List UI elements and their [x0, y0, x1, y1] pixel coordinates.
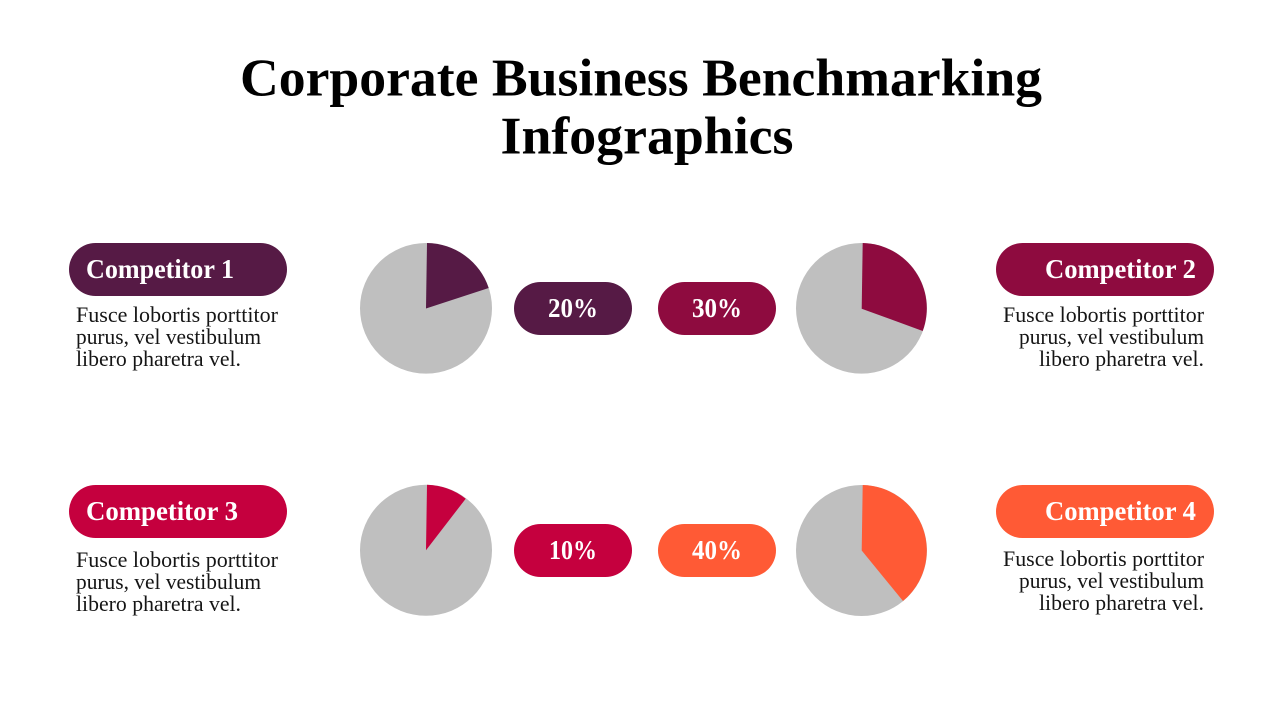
description: competitor 4: purus, vel vestibulum [1019, 568, 1204, 593]
label pill: competitor 1 [69, 243, 287, 296]
description: competitor 4 [1003, 546, 1205, 615]
pie chart: 20% [360, 243, 492, 374]
label pill: competitor 2 [996, 243, 1214, 296]
description: competitor 1: libero pharetra vel. [76, 346, 241, 371]
label pill: competitor 3: Competitor 3 [86, 496, 238, 526]
value pill: 40%: 40% [692, 535, 742, 565]
value pill: 10% [514, 524, 632, 577]
title [240, 50, 1042, 166]
label pill: competitor 4: Competitor 4 [1045, 496, 1196, 526]
value pill: 30% [658, 282, 776, 335]
description: competitor 2 [1003, 302, 1205, 371]
value pill: 20% [514, 282, 632, 335]
value pill: 20%: 20% [548, 293, 598, 323]
value pill: 30%: 30% [692, 293, 742, 323]
value pill: 40% [658, 524, 776, 577]
description: competitor 2: Fusce lobortis porttitor [1003, 302, 1205, 327]
description: competitor 4: Fusce lobortis porttitor [1003, 546, 1205, 571]
description: competitor 3: purus, vel vestibulum [76, 569, 261, 594]
pie chart: 10% [360, 485, 492, 616]
description: competitor 1 [76, 302, 279, 371]
description: competitor 3: libero pharetra vel. [76, 591, 241, 616]
panel: competitor 2 [658, 243, 1214, 374]
title: Corporate Business Benchmarking [240, 50, 1042, 108]
title: Infographics [500, 108, 794, 166]
description: competitor 4: libero pharetra vel. [1039, 590, 1204, 615]
value pill: 10%: 10% [549, 535, 597, 565]
pie chart: 30% [796, 243, 927, 374]
description: competitor 3 [76, 547, 279, 616]
label pill: competitor 1: Competitor 1 [86, 254, 234, 284]
description: competitor 1: purus, vel vestibulum [76, 324, 261, 349]
label pill: competitor 3 [69, 485, 287, 538]
description: competitor 2: libero pharetra vel. [1039, 346, 1204, 371]
panel: competitor 1 [69, 243, 632, 374]
description: competitor 2: purus, vel vestibulum [1019, 324, 1204, 349]
panel: competitor 4 [658, 485, 1214, 616]
label pill: competitor 2: Competitor 2 [1045, 254, 1196, 284]
label pill: competitor 4 [996, 485, 1214, 538]
description: competitor 1: Fusce lobortis porttitor [76, 302, 279, 327]
pie chart: 40% [796, 485, 927, 616]
panel: competitor 3 [69, 485, 632, 616]
description: competitor 3: Fusce lobortis porttitor [76, 547, 279, 572]
